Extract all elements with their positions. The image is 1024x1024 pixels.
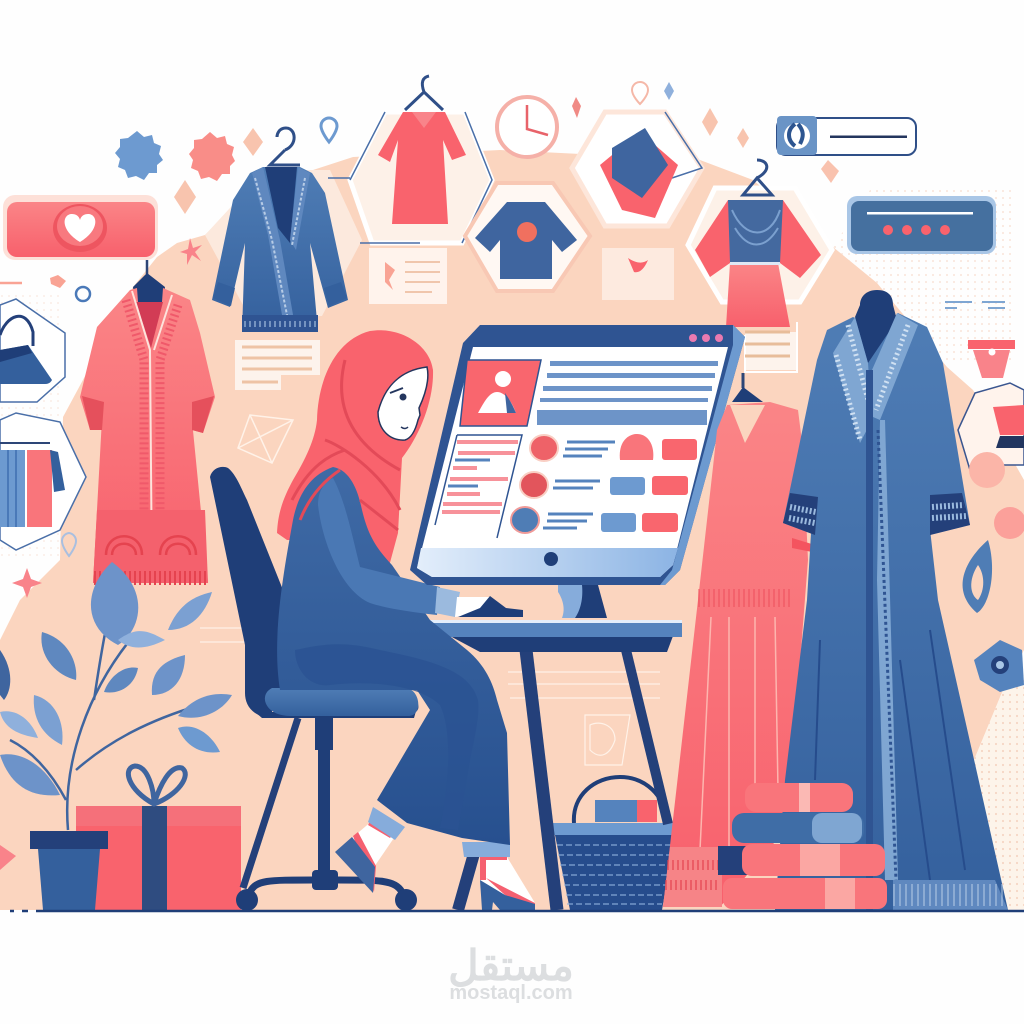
woman: shoes and socks bbox=[335, 807, 535, 910]
woman: body bbox=[277, 467, 510, 845]
coral long dress on hanger bbox=[663, 373, 815, 907]
pale halo hexagon behind jacket bbox=[205, 170, 362, 318]
peach background shape bbox=[0, 150, 1024, 910]
woman: cuff and hand bbox=[435, 587, 523, 617]
icon: map pin bbox=[321, 118, 337, 142]
icon: coral flower bbox=[189, 132, 235, 181]
plant bbox=[0, 562, 232, 830]
woman at desk bbox=[277, 330, 535, 910]
woman: lap shading bbox=[295, 644, 478, 830]
monitor: product rows bbox=[511, 434, 697, 533]
ground line bbox=[10, 910, 1024, 912]
icon: clock bbox=[497, 97, 557, 157]
monitor: stand bbox=[558, 585, 607, 618]
monitor: profile image bbox=[460, 360, 541, 426]
icon: folded scarves bbox=[600, 128, 678, 218]
watermark: mostaql.com bbox=[449, 982, 573, 1004]
heart card bbox=[3, 195, 158, 260]
watermark: مستقل bbox=[448, 942, 574, 989]
woman: hijab folds bbox=[292, 360, 400, 530]
faint background stripes bbox=[200, 628, 660, 698]
left hexagon: handbag bbox=[0, 299, 65, 402]
computer monitor bbox=[410, 325, 745, 618]
woman: hijab bbox=[277, 330, 433, 570]
coral long coat on hanger bbox=[80, 260, 215, 583]
desk chair bbox=[210, 467, 418, 911]
blue jacket on hanger bbox=[212, 128, 348, 332]
dots card bbox=[847, 196, 996, 254]
dotted pale panels bbox=[0, 190, 1024, 910]
left hexagon: clothes rack bbox=[0, 413, 86, 550]
small coral accents left bbox=[0, 238, 202, 870]
icon: blue t-shirt bbox=[475, 202, 577, 279]
monitor: window dots bbox=[689, 334, 723, 342]
search bar card bbox=[777, 116, 916, 155]
sketch note near desk bbox=[585, 715, 630, 765]
icon: coral t-shirt on hanger bbox=[378, 76, 466, 224]
right side small icons bbox=[958, 340, 1024, 692]
woman: arm bbox=[318, 478, 440, 615]
plant pot bbox=[30, 831, 108, 910]
stack of folded fabric bbox=[718, 783, 887, 909]
text note cards bbox=[235, 248, 797, 390]
monitor: heading lines bbox=[537, 361, 718, 425]
decorative geometric sketch bbox=[238, 415, 293, 463]
desk bbox=[397, 620, 682, 910]
icon: blue flower bbox=[115, 131, 163, 180]
monitor: left list bbox=[435, 435, 522, 538]
coral blouse on hanger bbox=[695, 160, 821, 327]
blue abaya on mannequin bbox=[775, 290, 1008, 910]
small accent lines top right bbox=[945, 302, 1005, 308]
monitor: frame bbox=[410, 325, 745, 585]
gift box bbox=[76, 766, 241, 910]
basket bbox=[553, 777, 677, 910]
woman: face bbox=[378, 367, 428, 440]
hexagon row bbox=[328, 112, 832, 302]
icon: sparkles bbox=[174, 82, 839, 214]
